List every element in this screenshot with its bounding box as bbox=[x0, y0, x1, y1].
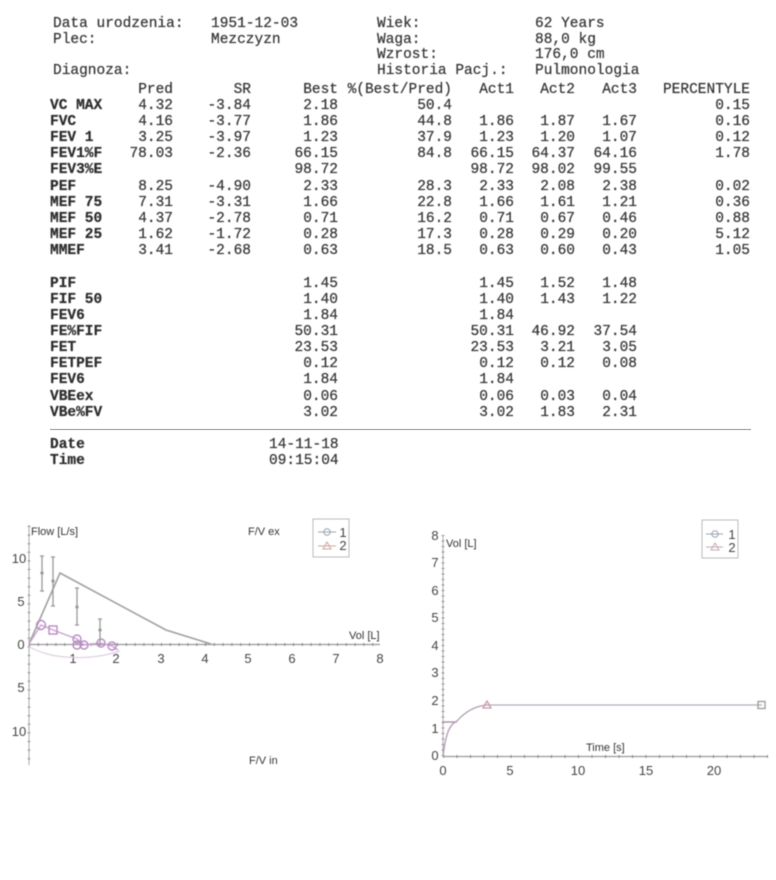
results table: inspiratory and other parameters: 0.06 bbox=[479, 389, 514, 405]
patient information header: Mezczyzn bbox=[211, 32, 281, 48]
results table: expiratory parameters: -1.72 bbox=[207, 227, 251, 243]
results table: expiratory parameters: FVC bbox=[50, 114, 76, 130]
results table: expiratory parameters: 0.12 bbox=[715, 130, 750, 146]
table column headers: SR bbox=[234, 82, 251, 98]
results table: inspiratory and other parameters: 0.12 bbox=[303, 356, 338, 372]
results table: inspiratory and other parameters: 1.84 bbox=[303, 372, 338, 388]
results table: expiratory parameters: 50.4 bbox=[417, 98, 452, 114]
measured flow curves and markers bbox=[29, 620, 120, 658]
results table: inspiratory and other parameters bbox=[50, 276, 637, 421]
flow-volume axis numbers: 10 bbox=[12, 551, 26, 566]
results table: expiratory parameters: 2.33 bbox=[479, 179, 514, 195]
volume-time axis numbers: 15 bbox=[639, 763, 653, 778]
results table: inspiratory and other parameters: 1.45 bbox=[303, 276, 338, 292]
volume-time axis numbers: 4 bbox=[431, 638, 439, 653]
date and time of examination: Time bbox=[50, 453, 85, 469]
results table: inspiratory and other parameters: FETPEF bbox=[50, 356, 102, 372]
results table: inspiratory and other parameters: 0.12 bbox=[540, 356, 575, 372]
table column headers: %(Best/Pred) bbox=[348, 82, 452, 98]
results table: expiratory parameters: 0.60 bbox=[540, 243, 575, 259]
results table: expiratory parameters: 0.20 bbox=[602, 227, 637, 243]
flow-volume axis numbers: 10 bbox=[12, 724, 26, 739]
results table: inspiratory and other parameters: 0.03 bbox=[540, 389, 575, 405]
results table: expiratory parameters: 4.16 bbox=[138, 114, 173, 130]
results table: expiratory parameters: FEV3%E bbox=[50, 162, 103, 178]
results table: expiratory parameters: 98.72 bbox=[294, 162, 338, 178]
results table: expiratory parameters: -3.31 bbox=[207, 195, 251, 211]
results table: expiratory parameters: 0.71 bbox=[479, 211, 514, 227]
table column headers: Act1 bbox=[479, 82, 514, 98]
results table: expiratory parameters: 1.61 bbox=[540, 195, 575, 211]
volume-time legend: 1 bbox=[728, 527, 736, 542]
flow-volume axis numbers: 0 bbox=[17, 637, 25, 652]
results table: inspiratory and other parameters: 50.31 bbox=[294, 324, 338, 340]
patient information header: Historia Pacj.: bbox=[377, 63, 508, 79]
results table: expiratory parameters: FEV 1 bbox=[50, 130, 94, 146]
flow-volume labels: Flow [L/s] bbox=[31, 526, 78, 538]
results table: expiratory parameters: 3.41 bbox=[138, 243, 173, 259]
patient information header: 88,0 kg bbox=[535, 32, 596, 48]
patient information header: Wzrost: bbox=[377, 47, 438, 63]
flow-volume axis numbers: 5 bbox=[244, 651, 252, 666]
results table: inspiratory and other parameters: PIF bbox=[50, 276, 76, 292]
results table: expiratory parameters: MMEF bbox=[50, 243, 85, 259]
results table: inspiratory and other parameters: 1.43 bbox=[540, 292, 575, 308]
results table: expiratory parameters: PEF bbox=[50, 179, 76, 195]
results table: expiratory parameters: 1.67 bbox=[602, 114, 637, 130]
volume-time axis numbers: 0 bbox=[439, 763, 447, 778]
volume-time axis numbers: 6 bbox=[431, 583, 439, 598]
results table: inspiratory and other parameters: 2.31 bbox=[602, 405, 637, 421]
results table: expiratory parameters: 0.63 bbox=[303, 243, 338, 259]
volume-time axis numbers: 5 bbox=[431, 610, 439, 625]
chart: flow-volume loop bbox=[12, 519, 384, 767]
results table: expiratory parameters: 1.86 bbox=[479, 114, 514, 130]
patient information header: 1951-12-03 bbox=[211, 16, 298, 32]
results table: inspiratory and other parameters: 0.06 bbox=[303, 389, 338, 405]
patient information header: Data urodzenia: bbox=[53, 16, 184, 32]
volume-time axis numbers: 8 bbox=[431, 528, 439, 543]
results table: expiratory parameters: 84.8 bbox=[417, 146, 452, 162]
results table: inspiratory and other parameters: 1.84 bbox=[479, 372, 514, 388]
results table: expiratory parameters: 98.72 bbox=[470, 162, 514, 178]
flow-volume axis numbers: 5 bbox=[17, 594, 25, 609]
results table: expiratory parameters: -2.36 bbox=[207, 146, 251, 162]
results table: expiratory parameters: VC MAX bbox=[50, 98, 103, 114]
results table: expiratory parameters: 64.16 bbox=[593, 146, 637, 162]
patient information header bbox=[53, 16, 640, 79]
results table: expiratory parameters: 78.03 bbox=[129, 146, 173, 162]
results table: expiratory parameters: 66.15 bbox=[470, 146, 514, 162]
results table: inspiratory and other parameters: 1.84 bbox=[303, 308, 338, 324]
flow-volume axis numbers: 1 bbox=[69, 651, 77, 666]
results table: expiratory parameters: 1.62 bbox=[138, 227, 173, 243]
results table: inspiratory and other parameters: 50.31 bbox=[470, 324, 514, 340]
results table: expiratory parameters bbox=[50, 98, 750, 259]
results table: expiratory parameters: 0.36 bbox=[715, 195, 750, 211]
results table: inspiratory and other parameters: FET bbox=[50, 340, 76, 356]
patient information header: 176,0 cm bbox=[535, 47, 605, 63]
results table: expiratory parameters: 0.43 bbox=[602, 243, 637, 259]
results table: expiratory parameters: -4.90 bbox=[207, 179, 251, 195]
results table: expiratory parameters: 1.78 bbox=[715, 146, 750, 162]
results table: expiratory parameters: 0.29 bbox=[540, 227, 575, 243]
results table: expiratory parameters: 5.12 bbox=[715, 227, 750, 243]
results table: expiratory parameters: 1.23 bbox=[479, 130, 514, 146]
patient information header: Wiek: bbox=[377, 16, 421, 32]
flow-volume axes bbox=[29, 525, 380, 765]
results table: expiratory parameters: 28.3 bbox=[417, 179, 452, 195]
flow-volume labels bbox=[31, 526, 380, 767]
patient information header: Pulmonologia bbox=[535, 63, 640, 79]
volume-time legend: 2 bbox=[728, 540, 736, 555]
measured volume curves bbox=[443, 701, 765, 756]
flow-volume legend bbox=[313, 519, 349, 557]
flow-volume legend: 1 bbox=[339, 525, 347, 540]
results table: expiratory parameters: 37.9 bbox=[417, 130, 452, 146]
results table: expiratory parameters: MEF 50 bbox=[50, 211, 102, 227]
flow-volume axis numbers: 8 bbox=[376, 651, 384, 666]
results table: expiratory parameters: 4.37 bbox=[138, 211, 173, 227]
patient information header: Diagnoza: bbox=[53, 63, 131, 79]
results table: expiratory parameters: 1.66 bbox=[479, 195, 514, 211]
table column headers: Act3 bbox=[602, 82, 637, 98]
flow-volume axis numbers: 6 bbox=[288, 651, 296, 666]
results table: expiratory parameters: 0.88 bbox=[715, 211, 750, 227]
results table: inspiratory and other parameters: 0.12 bbox=[479, 356, 514, 372]
table column headers: Act2 bbox=[540, 82, 575, 98]
volume-time axis numbers: 3 bbox=[431, 665, 439, 680]
flow-volume axis numbers: 7 bbox=[332, 651, 340, 666]
flow-volume axis numbers bbox=[12, 551, 384, 739]
results table: inspiratory and other parameters: 1.45 bbox=[479, 276, 514, 292]
flow-volume labels: F/V in bbox=[249, 755, 278, 767]
predicted value error bars bbox=[40, 556, 102, 644]
flow-volume axis numbers: 5 bbox=[17, 680, 25, 695]
flow-volume legend: 2 bbox=[339, 538, 347, 553]
volume-time axis numbers: 5 bbox=[506, 763, 514, 778]
results table: expiratory parameters: 1.21 bbox=[602, 195, 637, 211]
results table: expiratory parameters: 1.07 bbox=[602, 130, 637, 146]
results table: expiratory parameters: 8.25 bbox=[138, 179, 173, 195]
results table: expiratory parameters: -3.97 bbox=[207, 130, 251, 146]
date and time of examination: Date bbox=[50, 437, 85, 453]
volume-time axis numbers: 20 bbox=[707, 763, 721, 778]
results table: inspiratory and other parameters: 23.53 bbox=[294, 340, 338, 356]
volume-time axis numbers: 10 bbox=[571, 763, 585, 778]
patient information header: 62 Years bbox=[535, 16, 605, 32]
volume-time axis numbers: 7 bbox=[431, 555, 439, 570]
results table: expiratory parameters: 2.38 bbox=[602, 179, 637, 195]
results table: inspiratory and other parameters: 1.40 bbox=[303, 292, 338, 308]
results table: expiratory parameters: -3.84 bbox=[207, 98, 251, 114]
patient information header: Waga: bbox=[377, 32, 421, 48]
results table: inspiratory and other parameters: 0.04 bbox=[602, 389, 637, 405]
results table: expiratory parameters: 18.5 bbox=[417, 243, 452, 259]
results table: expiratory parameters: 1.87 bbox=[540, 114, 575, 130]
results table: expiratory parameters: -2.68 bbox=[207, 243, 251, 259]
results table: expiratory parameters: FEV1%F bbox=[50, 146, 102, 162]
results table: expiratory parameters: 0.16 bbox=[715, 114, 750, 130]
results table: expiratory parameters: 2.08 bbox=[540, 179, 575, 195]
results table: expiratory parameters: 22.8 bbox=[417, 195, 452, 211]
results table: expiratory parameters: 99.55 bbox=[593, 162, 637, 178]
results table: inspiratory and other parameters: 3.05 bbox=[602, 340, 637, 356]
results table: expiratory parameters: 1.20 bbox=[540, 130, 575, 146]
results table: expiratory parameters: 0.63 bbox=[479, 243, 514, 259]
results table: inspiratory and other parameters: FE%FIF bbox=[50, 324, 102, 340]
results table: inspiratory and other parameters: 1.84 bbox=[479, 308, 514, 324]
results table: expiratory parameters: 7.31 bbox=[138, 195, 173, 211]
results table: expiratory parameters: 0.28 bbox=[479, 227, 514, 243]
results table: expiratory parameters: 98.02 bbox=[531, 162, 575, 178]
results table: inspiratory and other parameters: VBe%FV bbox=[50, 405, 103, 421]
patient information header: Plec: bbox=[53, 32, 97, 48]
results table: inspiratory and other parameters: 0.08 bbox=[602, 356, 637, 372]
results table: inspiratory and other parameters: VBEex bbox=[50, 389, 94, 405]
volume-time axis numbers: 2 bbox=[431, 693, 439, 708]
results table: inspiratory and other parameters: 23.53 bbox=[470, 340, 514, 356]
table column headers: Pred bbox=[138, 82, 173, 98]
volume-time axis numbers: 0 bbox=[431, 748, 439, 763]
results table: inspiratory and other parameters: FEV6 bbox=[50, 372, 85, 388]
volume-time axis numbers bbox=[431, 528, 721, 778]
results table: expiratory parameters: 0.28 bbox=[303, 227, 338, 243]
results table: expiratory parameters: 1.23 bbox=[303, 130, 338, 146]
results table: expiratory parameters: 44.8 bbox=[417, 114, 452, 130]
flow-volume labels: F/V ex bbox=[248, 526, 280, 538]
results table: inspiratory and other parameters: 3.02 bbox=[479, 405, 514, 421]
results table: inspiratory and other parameters: 3.21 bbox=[540, 340, 575, 356]
flow-volume labels: Vol [L] bbox=[349, 630, 380, 642]
table column headers bbox=[138, 82, 750, 98]
date and time of examination: 14-11-18 bbox=[269, 437, 339, 453]
results table: expiratory parameters: 3.25 bbox=[138, 130, 173, 146]
volume-time legend bbox=[702, 520, 738, 558]
results table: inspiratory and other parameters: 1.52 bbox=[540, 276, 575, 292]
results table: expiratory parameters: 0.67 bbox=[540, 211, 575, 227]
results table: expiratory parameters: 4.32 bbox=[138, 98, 173, 114]
results table: expiratory parameters: 0.71 bbox=[303, 211, 338, 227]
results table: inspiratory and other parameters: 37.54 bbox=[593, 324, 637, 340]
flow-volume axis numbers: 2 bbox=[112, 651, 120, 666]
volume-time axes bbox=[443, 535, 768, 756]
results table: inspiratory and other parameters: 1.48 bbox=[602, 276, 637, 292]
date and time of examination bbox=[50, 437, 339, 469]
results table: expiratory parameters: 64.37 bbox=[531, 146, 575, 162]
results table: expiratory parameters: MEF 75 bbox=[50, 195, 102, 211]
volume-time labels bbox=[446, 538, 625, 754]
predicted flow curve bbox=[29, 573, 211, 644]
flow-volume axis numbers: 4 bbox=[201, 651, 209, 666]
results table: expiratory parameters: MEF 25 bbox=[50, 227, 102, 243]
results table: expiratory parameters: 2.33 bbox=[303, 179, 338, 195]
volume-time axis numbers: 1 bbox=[431, 721, 439, 736]
table column headers: PERCENTYLE bbox=[663, 82, 750, 98]
results table: expiratory parameters: 0.46 bbox=[602, 211, 637, 227]
table column headers: Best bbox=[303, 82, 338, 98]
results table: expiratory parameters: 0.02 bbox=[715, 179, 750, 195]
results table: expiratory parameters: -3.77 bbox=[207, 114, 251, 130]
date and time of examination: 09:15:04 bbox=[269, 453, 339, 469]
results table: inspiratory and other parameters: 3.02 bbox=[303, 405, 338, 421]
results table: inspiratory and other parameters: 1.40 bbox=[479, 292, 514, 308]
results table: inspiratory and other parameters: FIF 50 bbox=[50, 292, 102, 308]
volume-time labels: Vol [L] bbox=[446, 538, 477, 550]
results table: inspiratory and other parameters: 46.92 bbox=[531, 324, 575, 340]
results table: expiratory parameters: 2.18 bbox=[303, 98, 338, 114]
results table: expiratory parameters: 1.05 bbox=[715, 243, 750, 259]
results table: expiratory parameters: 1.66 bbox=[303, 195, 338, 211]
volume-time labels: Time [s] bbox=[586, 742, 625, 754]
flow-volume axis numbers: 3 bbox=[157, 651, 165, 666]
results table: expiratory parameters: 17.3 bbox=[417, 227, 452, 243]
results table: inspiratory and other parameters: FEV6 bbox=[50, 308, 85, 324]
results table: inspiratory and other parameters: 1.83 bbox=[540, 405, 575, 421]
chart: volume-time curve bbox=[431, 520, 768, 778]
results table: inspiratory and other parameters: 1.22 bbox=[602, 292, 637, 308]
results table: expiratory parameters: -2.78 bbox=[207, 211, 251, 227]
results table: expiratory parameters: 0.15 bbox=[715, 98, 750, 114]
results table: expiratory parameters: 1.86 bbox=[303, 114, 338, 130]
results table: expiratory parameters: 16.2 bbox=[417, 211, 452, 227]
results table: expiratory parameters: 66.15 bbox=[294, 146, 338, 162]
